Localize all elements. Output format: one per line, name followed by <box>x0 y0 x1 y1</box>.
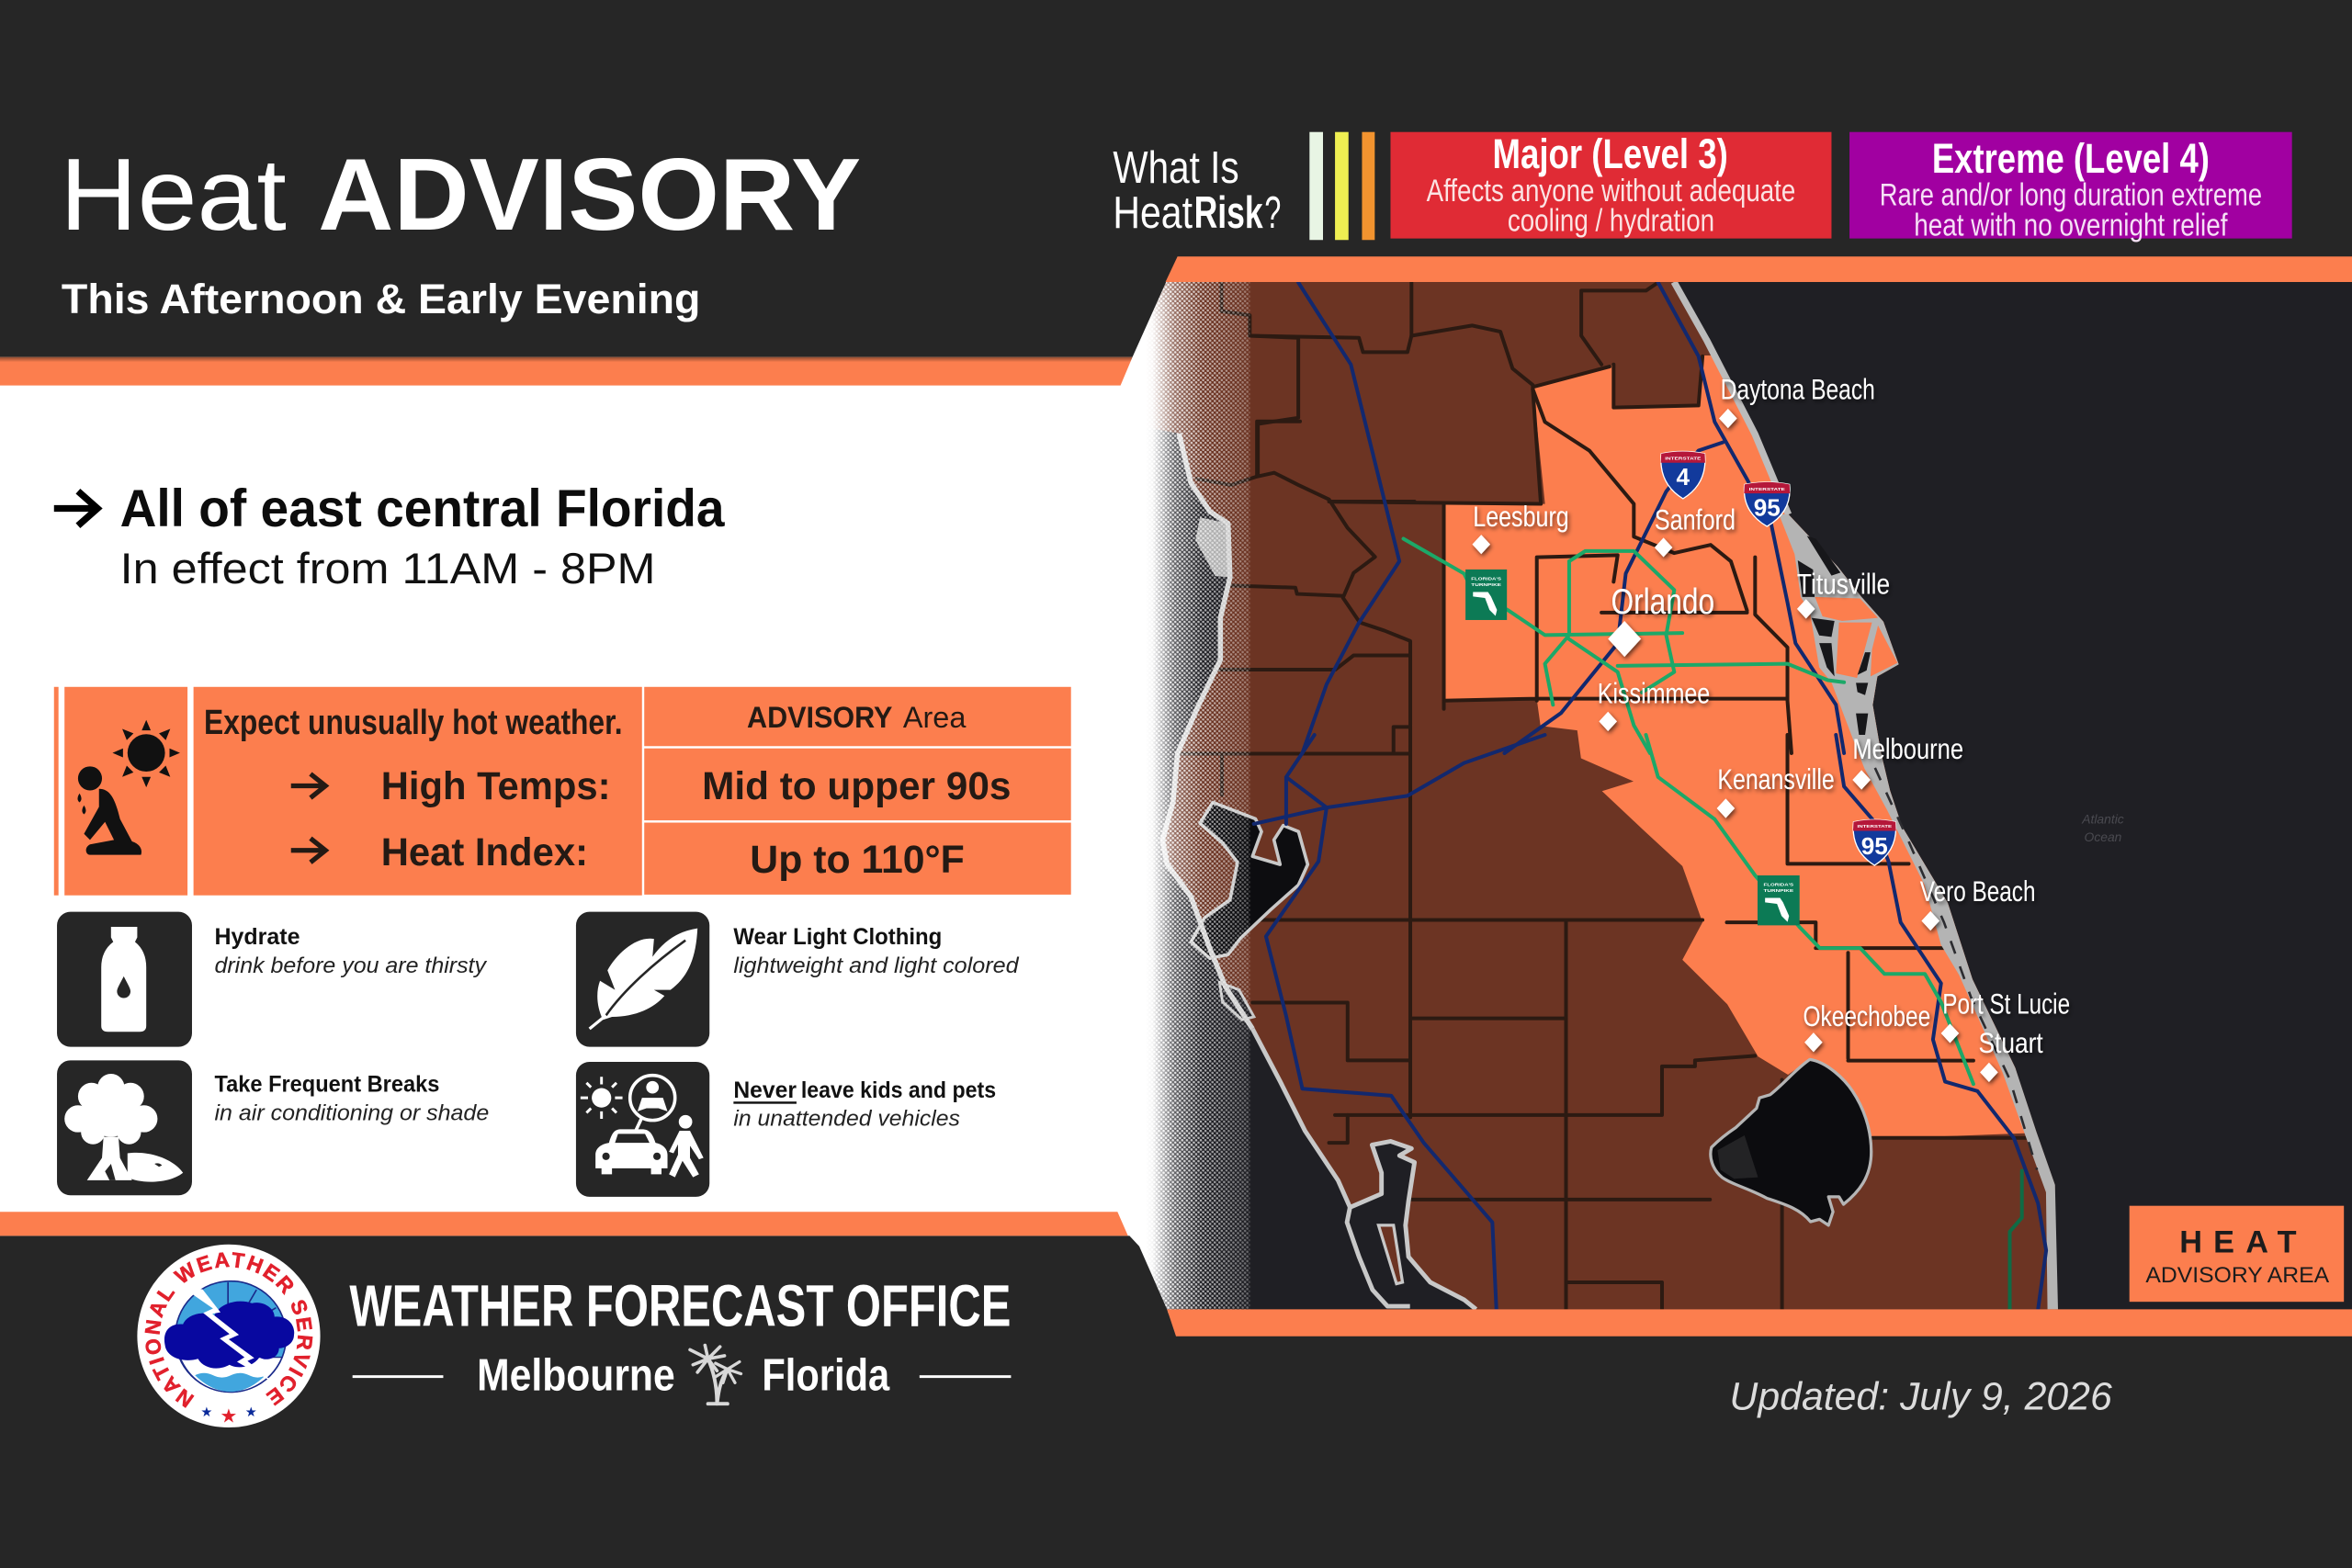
logo cloud <box>164 1302 294 1369</box>
icon: water bottle <box>57 912 192 1047</box>
logo: National Weather Service <box>137 1244 321 1427</box>
land: heat advisory area <box>1444 355 2033 1139</box>
logo lower band and water <box>180 1358 282 1392</box>
panel: Major level 3: Affects anyone without adequate <box>1427 174 1795 209</box>
east coast barrier islands <box>1674 282 2058 1309</box>
tip: vehicles <box>576 1062 996 1197</box>
Tampa Bay water <box>1191 803 1307 958</box>
city markers and labels: Leesburg <box>1473 501 1569 533</box>
heading: What Is HeatRisk: Heat <box>1113 188 1193 238</box>
west coastline <box>1162 434 1252 1029</box>
logo stars <box>200 1405 257 1427</box>
panel: Major level 3 <box>1390 130 1831 239</box>
cell: high temps value: Mid to upper 90s <box>702 764 1011 807</box>
updated date: Updated: July 9, 2026 <box>1729 1375 2112 1418</box>
tip: breaks: Take Frequent Breaks <box>214 1072 439 1098</box>
office location: Melbourne <box>477 1350 675 1400</box>
shield: I-95 south <box>1853 819 1896 865</box>
sign: Florida's Turnpike south: FLORIDA'S <box>1764 882 1793 886</box>
icon: palm trees <box>690 1346 741 1404</box>
county lines west <box>1179 422 1782 1309</box>
county lines east <box>1727 735 2030 1138</box>
shield: I-95 south: 95 <box>1861 832 1888 860</box>
label: Atlantic Ocean: Atlantic <box>2081 811 2124 826</box>
shield: I-95 north: INTERSTATE <box>1749 487 1785 491</box>
icon: person in heat <box>64 687 187 896</box>
legend: heat advisory area <box>2130 1206 2344 1302</box>
heading: What Is HeatRisk: ? <box>1264 188 1281 238</box>
orange bar: under header <box>0 357 1133 386</box>
text: expect and labels <box>194 687 642 896</box>
sign: Florida's Turnpike north: FLORIDA'S <box>1471 576 1501 581</box>
map <box>1143 279 2352 1314</box>
office location: Florida <box>762 1350 890 1400</box>
panel: Extreme level 4: Rare and/or long duration extreme <box>1880 178 2262 213</box>
title <box>60 137 861 252</box>
top dark band <box>0 0 2352 357</box>
orange bar: above map <box>1166 256 2352 282</box>
logo stars: ★ <box>220 1406 237 1427</box>
cell: advisory area header: Area <box>903 700 967 734</box>
cell: high temps value <box>644 749 1071 820</box>
HeatRisk key <box>1113 130 2292 243</box>
interstate highways <box>1254 283 2046 1309</box>
sign: Florida's Turnpike north <box>1465 570 1507 620</box>
tip: breaks: in air conditioning or shade <box>214 1101 489 1126</box>
city markers and labels: Sanford <box>1655 503 1736 536</box>
logo stars: ★ <box>200 1405 213 1420</box>
bottom dark band <box>0 1235 2352 1568</box>
city markers and labels: Orlando <box>1611 582 1714 622</box>
tip: hydrate: Hydrate <box>214 924 300 950</box>
logo sky dome <box>175 1281 287 1392</box>
shield: I-4: INTERSTATE <box>1665 456 1702 460</box>
office name: WEATHER FORECAST OFFICE <box>349 1273 1011 1338</box>
heading: What Is HeatRisk: Risk <box>1194 188 1263 238</box>
turnpike and toll roads <box>1404 538 2022 1309</box>
tip: clothing <box>576 912 1020 1047</box>
thin accent strip <box>54 687 59 896</box>
barrier islands southwest <box>1219 982 1476 1309</box>
city markers and labels: Vero Beach <box>1920 875 2036 908</box>
cell: heat index value: Up to 110°F <box>750 838 965 881</box>
icon: feather <box>576 912 709 1047</box>
tip: hydrate <box>57 912 488 1047</box>
logo ring text: NATIONAL WEATHER SERVICE <box>145 1252 312 1408</box>
gulf coast island patch <box>1195 517 1230 578</box>
orange bar: below map <box>1167 1309 2352 1337</box>
panel: Extreme level 4: heat with no overnight relief <box>1914 208 2228 243</box>
title: Heat <box>60 137 287 252</box>
shield: I-95 south: INTERSTATE <box>1858 824 1892 829</box>
cell: heat index value <box>644 823 1071 895</box>
city markers and labels: Melbourne <box>1852 733 1963 765</box>
tip: clothing: lightweight and light colored <box>733 953 1020 978</box>
sign: Florida's Turnpike north: TURNPIKE <box>1471 582 1501 587</box>
panel: Major level 3: Major (Level 3) <box>1492 130 1728 177</box>
city markers and labels: Okeechobee <box>1803 1000 1930 1032</box>
city markers and labels: Titusville <box>1797 569 1890 601</box>
panel: advisory table <box>54 687 1071 896</box>
orange bar: above footer <box>0 1212 1128 1235</box>
land: non-advisory counties <box>1146 282 2055 1309</box>
city markers and labels: Kissimmee <box>1598 678 1710 710</box>
legend: heat advisory area: ADVISORY AREA <box>2145 1263 2330 1288</box>
tip: hydrate: drink before you are thirsty <box>214 953 488 978</box>
panel: Extreme level 4: Extreme (Level 4) <box>1932 135 2210 182</box>
icon: car, child and person <box>576 1062 709 1197</box>
area heading: In effect from 11AM - 8PM <box>120 545 655 593</box>
icon: tree and shade <box>57 1060 192 1195</box>
city markers and labels: Daytona Beach <box>1721 373 1875 405</box>
city markers and labels: Kenansville <box>1717 763 1835 795</box>
office location <box>353 1350 1011 1400</box>
logo lightning bolt <box>183 1288 274 1382</box>
text: expect and labels: Heat Index: <box>381 830 588 874</box>
sign: Florida's Turnpike south: TURNPIKE <box>1764 888 1793 893</box>
title: ADVISORY <box>318 137 861 252</box>
shield: I-95 north: 95 <box>1754 494 1781 522</box>
panel: Major level 3: cooling / hydration <box>1508 203 1714 238</box>
area heading <box>54 479 726 593</box>
cell: advisory area header: ADVISORY <box>747 700 893 734</box>
tip: clothing: Wear Light Clothing <box>733 924 942 950</box>
map ocean background <box>1146 279 2352 1314</box>
tip: vehicles: in unattended vehicles <box>733 1106 960 1131</box>
shield: I-4 <box>1661 451 1705 499</box>
panel: white content area <box>0 279 1185 1314</box>
arrow <box>54 491 97 525</box>
text: expect and labels: High Temps: <box>381 764 610 807</box>
tip: vehicles: leave kids and pets <box>801 1077 996 1103</box>
shield: I-95 north <box>1744 482 1790 526</box>
halftone map edge <box>1143 279 1251 1314</box>
heading: What Is HeatRisk: What Is <box>1113 143 1239 193</box>
area heading: All of east central Florida <box>120 479 726 538</box>
subtitle: This Afternoon & Early Evening <box>62 276 700 322</box>
tip: vehicles: Never <box>733 1077 797 1103</box>
legend: heat advisory area: HEAT <box>2179 1224 2297 1259</box>
level colour bars <box>1309 132 1374 240</box>
Lake Okeechobee <box>1711 1059 1871 1225</box>
label: Atlantic Ocean <box>2081 811 2124 844</box>
tip: breaks <box>57 1060 489 1195</box>
city markers and labels: Stuart <box>1978 1027 2043 1059</box>
panel: Extreme level 4 <box>1849 132 2292 243</box>
text: expect and labels: Expect unusually hot weather. <box>204 703 623 741</box>
label: Atlantic Ocean: Ocean <box>2085 829 2122 844</box>
logo stars: ★ <box>245 1405 257 1420</box>
cell: advisory area header <box>644 687 1071 746</box>
city markers and labels: Port St Lucie <box>1942 988 2070 1021</box>
shield: I-4: 4 <box>1677 463 1690 491</box>
county lines north <box>1222 283 1792 753</box>
sign: Florida's Turnpike south <box>1758 875 1800 925</box>
heading: What Is HeatRisk <box>1113 143 1281 238</box>
city markers and labels <box>1472 373 2070 1082</box>
